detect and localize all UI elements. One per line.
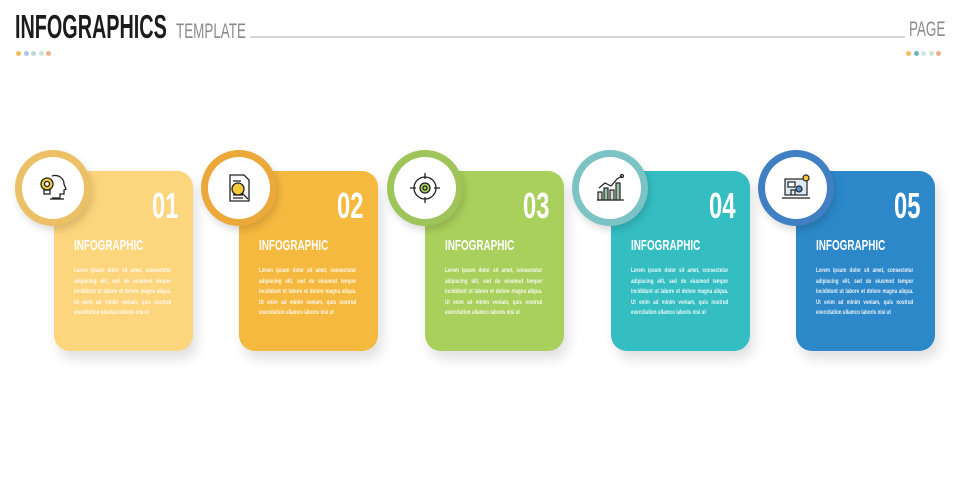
panel: step 01: INFOGRAPHIC	[74, 237, 143, 254]
header line	[250, 36, 905, 38]
title: TEMPLATE	[176, 20, 246, 43]
icon: presentation laptop	[758, 150, 834, 226]
panel: step 05: Lorem ipsum dolor sit amet, consectetur adipiscing elit, sed do eiusmod tempor incididunt ut labore et dolore magna aliqua. Ut enim ad minim veniam, quis nostrud exercitation ullamco laboris nisi ut	[816, 267, 913, 316]
icon: bar chart growth	[572, 150, 648, 226]
panel: step 02: 02	[337, 185, 363, 226]
panel: step 02	[239, 171, 378, 351]
panel: step 03: 03	[523, 185, 549, 226]
panel: step 02: INFOGRAPHIC	[259, 237, 328, 254]
icon: document magnifier	[201, 150, 277, 226]
panel: step 03	[425, 171, 564, 351]
panel: step 05: 05	[894, 185, 920, 226]
panel: step 04: INFOGRAPHIC	[631, 237, 700, 254]
panel: step 04: 04	[709, 185, 735, 226]
title	[15, 8, 246, 45]
panel: step 05: INFOGRAPHIC	[816, 237, 885, 254]
panel: step 05	[796, 171, 935, 351]
panel: step 03: INFOGRAPHIC	[445, 237, 514, 254]
panel: step 04: Lorem ipsum dolor sit amet, consectetur adipiscing elit, sed do eiusmod tempor incididunt ut labore et dolore magna aliqua. Ut enim ad minim veniam, quis nostrud exercitation ullamco laboris nisi ut	[631, 267, 728, 316]
dots right	[906, 51, 941, 56]
panel: step 02: Lorem ipsum dolor sit amet, consectetur adipiscing elit, sed do eiusmod tempor incididunt ut labore et dolore magna aliqua. Ut enim ad minim veniam, quis nostrud exercitation ullamco laboris nisi ut	[259, 267, 356, 316]
panel: step 03: Lorem ipsum dolor sit amet, consectetur adipiscing elit, sed do eiusmod tempor incididunt ut labore et dolore magna aliqua. Ut enim ad minim veniam, quis nostrud exercitation ullamco laboris nisi ut	[445, 267, 542, 316]
icon: target gear	[387, 150, 463, 226]
page label: PAGE	[909, 18, 945, 41]
panel: step 04	[611, 171, 750, 351]
panel: step 01: 01	[152, 185, 178, 226]
icon: head with lightbulb	[15, 150, 91, 226]
panel: step 01: Lorem ipsum dolor sit amet, consectetur adipiscing elit, sed do eiusmod tempor incididunt ut labore et dolore magna aliqua. Ut enim ad minim veniam, quis nostrud exercitation ullamco laboris nisi ut	[74, 267, 171, 316]
panel: step 01	[54, 171, 193, 351]
dots left	[16, 51, 51, 56]
title: INFOGRAPHICS	[15, 8, 167, 45]
